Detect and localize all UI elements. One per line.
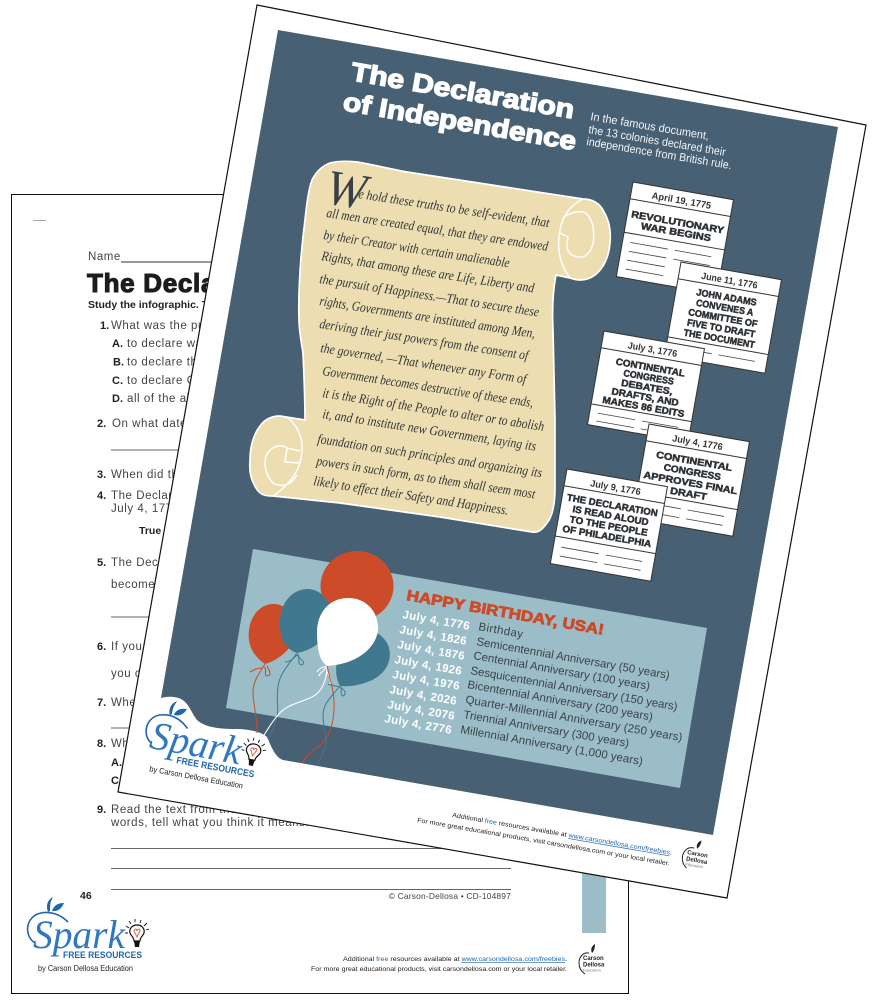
quote text: e hold these truths to be self-evident, that [358, 186, 552, 230]
anniversary dates: July 4, 2076 [386, 699, 456, 723]
drop cap W: W [322, 159, 374, 221]
timeline card: June 11, 1776: JOHN ADAMS [695, 287, 757, 309]
logo: Carson Dellosa: Carson [583, 956, 604, 962]
logo: Spark Free Resources: Spark [33, 912, 126, 957]
timeline card: July 3, 1776: CONGRESS [622, 368, 675, 388]
balloon strings [250, 653, 345, 765]
anniversary dates: July 4, 2776 [383, 713, 453, 737]
question list: 9. [97, 804, 106, 816]
timeline card: April 19, 1775: April 19, 1775 [651, 191, 713, 212]
timeline card: July 3, 1776: July 3, 1776 [627, 340, 678, 360]
question list: become [111, 579, 155, 591]
title: The Declaration [349, 56, 577, 124]
timeline card: July 3, 1776 [588, 331, 704, 442]
worksheet title: The Declaration of Independence [87, 268, 518, 298]
logo: Carson Dellosa, front page: Carson [687, 850, 708, 860]
timeline card: July 3, 1776: DEBATES, [620, 378, 673, 398]
question list: 5. [97, 557, 106, 569]
question list: July 4, 1776. [111, 503, 183, 515]
quote text: it, and to institute new Government, laying its [322, 406, 537, 454]
logo: Spark Free Resources: by Carson Dellosa Education [38, 964, 133, 973]
timeline card: June 11, 1776 [665, 262, 781, 373]
anniversary names: Semicentennial Anniversary (50 years) [475, 636, 671, 682]
footer resource text, front page: Additional free resources available at www.carsondellosa.com/freebies . [452, 812, 673, 857]
quote text: foundation on such principles and organizing its [317, 431, 543, 480]
timeline card: July 4, 1776: APPROVES FINAL [643, 470, 738, 497]
anniversary names: Centennial Anniversary (100 years) [472, 650, 651, 693]
logo: Carson Dellosa: Dellosa [583, 962, 605, 968]
anniversary dates [383, 609, 471, 737]
timeline card: July 4, 1776: DRAFT [669, 486, 708, 503]
timeline card: June 11, 1776: June 11, 1776 [700, 271, 758, 292]
timeline card: April 19, 1775 [616, 182, 733, 294]
logo: Spark Free Resources, front page [138, 697, 272, 793]
timeline card: July 9, 1776: OF PHILADELPHIA [562, 524, 652, 550]
anniversary names: Bicentennial Anniversary (200 years) [466, 679, 654, 724]
question list: When did the [111, 469, 185, 481]
quote text: it is the Right of the People to alter or to abolish [322, 385, 545, 434]
balloons [249, 551, 394, 765]
subtitle text: the 13 colonies declared their [588, 124, 727, 159]
question list: words, tell what you think it means. [110, 817, 309, 829]
subtitle text: In the famous document, [590, 111, 710, 143]
anniversary names: Sesquicentennial Anniversary (150 years) [469, 665, 679, 713]
question list: What was the purpose of the Declaration? [111, 320, 347, 332]
anniversary dates: July 4, 1776 [401, 609, 471, 633]
panel: front infographic page [118, 5, 866, 898]
question list: C. [112, 375, 123, 387]
question list: The Declaration [111, 557, 200, 569]
anniversary names [459, 621, 683, 768]
quote text: Government becomes destructive of these ends, [322, 363, 534, 410]
footer resource text: For more great educational products, visit carsondellosa.com or your local retailer. [311, 966, 567, 973]
question list: you could [111, 668, 165, 680]
timeline card: July 4, 1776: July 4, 1776 [671, 433, 723, 453]
timeline card: July 9, 1776 [550, 469, 667, 581]
quote text: the governed, —That whenever any Form of [320, 340, 529, 387]
logo: Carson Dellosa, front page: Education [685, 861, 703, 869]
quote text: likely to effect their Safety and Happiness. [313, 473, 510, 518]
anniversary names: Triennial Anniversary (300 years) [462, 709, 630, 750]
timeline card: June 11, 1776: COMMITTEE OF [687, 307, 758, 330]
question list: D. [112, 393, 123, 405]
timeline card: July 9, 1776: THE DECLARATION [566, 493, 659, 519]
title [341, 56, 579, 156]
footer resource text [311, 956, 567, 973]
question list: The Declaration [111, 490, 200, 502]
question list: to declare war [127, 338, 207, 350]
question list: 7. [97, 697, 106, 709]
question list: 2. [97, 418, 106, 430]
timeline card: June 11, 1776: THE DOCUMENT [683, 328, 756, 351]
copyright line: © Carson-Dellosa • CD-104897 [389, 891, 511, 901]
question list: to declare Great Britain's rule [127, 375, 293, 387]
panel: Happy Birthday, USA [226, 549, 707, 788]
question list: all of the above [127, 393, 214, 405]
quote text: deriving their just powers from the consent of [319, 316, 531, 363]
logo: Spark Free Resources, front page: Spark [147, 712, 247, 774]
footer resource text, front page: For more great educational products, visit carsondellosa.com or your local retailer. [417, 817, 670, 868]
logo: Spark Free Resources, front page: FREE RESOURCES [175, 755, 255, 780]
anniversary names: Millennial Anniversary (1,000 years) [459, 724, 644, 768]
logo: Spark Free Resources: FREE RESOURCES [63, 950, 142, 961]
question list: If you [111, 641, 142, 653]
heading: Happy Birthday, USA: HAPPY BIRTHDAY, USA! [405, 587, 605, 639]
worksheet instructions: Study the infographic. Then, answer the questions. [88, 299, 343, 311]
subtitle text: independence from British rule. [586, 136, 732, 172]
quote text: rights, Governments are instituted among Men, [319, 293, 536, 341]
logo: Spark Free Resources [28, 897, 149, 973]
anniversary names: Quarter-Millennial Anniversary (250 years) [464, 694, 683, 744]
question list [97, 320, 511, 890]
question list: True [139, 525, 161, 537]
logo: Spark Free Resources, front page: by Carson Dellosa Education [149, 764, 244, 791]
timeline card: July 4, 1776: CONTINENTAL [655, 450, 733, 474]
quote text: Rights, that among these are Life, Liberty and [320, 248, 536, 296]
question list: 3. [97, 469, 106, 481]
timeline card: June 11, 1776: CONVENES A [695, 298, 754, 319]
timeline card: July 4, 1776 [632, 424, 749, 536]
timeline card: June 11, 1776: FIVE TO DRAFT [686, 318, 756, 340]
quote text: the pursuit of Happiness.—That to secure these [319, 271, 540, 320]
timeline card: July 3, 1776: CONTINENTAL [615, 357, 686, 380]
question list: Read the text from the Declaration. [111, 804, 309, 816]
quote text: all men are created equal, that they are endowed [326, 205, 549, 254]
question list: A. [111, 757, 122, 769]
anniversary dates: July 4, 1926 [393, 654, 463, 678]
page number: 46 [80, 890, 92, 902]
timeline card: April 19, 1775: REVOLUTIONARY [630, 209, 726, 237]
question list: B. [113, 356, 124, 368]
timeline card: July 4, 1776: CONGRESS [663, 462, 722, 483]
question list: When [111, 697, 143, 709]
question list: 4. [97, 490, 106, 502]
logo: Carson Dellosa, front page [681, 838, 711, 872]
quote text: by their Creator with certain unalienable [323, 227, 511, 270]
scroll with quote [250, 159, 610, 532]
timeline card: April 19, 1775: WAR BEGINS [640, 221, 712, 244]
question list: to declare the colonies free [127, 356, 280, 368]
title: of Independence [341, 86, 579, 156]
timeline card: July 9, 1776: TO THE PEOPLE [569, 514, 648, 539]
question list: When [111, 738, 143, 750]
timeline card: July 9, 1776: IS READ ALOUD [572, 504, 649, 528]
question list: C. [111, 775, 122, 787]
quote text [313, 186, 552, 518]
timeline card: July 3, 1776: MAKES 86 EDITS [601, 395, 685, 420]
subtitle text [586, 111, 732, 172]
logo: Carson Dellosa [579, 944, 605, 974]
logo: Carson Dellosa: Education [583, 968, 601, 972]
timeline card: July 3, 1776: DRAFTS, AND [611, 386, 680, 409]
anniversary dates: July 4, 1876 [396, 639, 466, 663]
quote text: powers in such form, as to them shall seem most [315, 453, 537, 502]
dark blue background panel [161, 30, 838, 835]
question list: On what date [112, 418, 187, 430]
logo: Carson Dellosa, front page: Dellosa [686, 856, 708, 866]
panel: back worksheet page [12, 194, 628, 994]
anniversary names: Birthday [477, 621, 524, 641]
worksheet name line: Name [88, 251, 121, 263]
anniversary dates: July 4, 2026 [388, 684, 458, 708]
timeline card: July 9, 1776: July 9, 1776 [589, 478, 641, 498]
footer resource text: Additional free resources available at www.carsondellosa.com/freebies . [343, 956, 567, 963]
question list: 6. [97, 641, 106, 653]
question list: 1. [100, 320, 109, 332]
anniversary dates: July 4, 1976 [391, 669, 461, 693]
question list: A. [112, 338, 123, 350]
question list: 8. [97, 738, 106, 750]
anniversary dates: July 4, 1826 [398, 624, 468, 648]
